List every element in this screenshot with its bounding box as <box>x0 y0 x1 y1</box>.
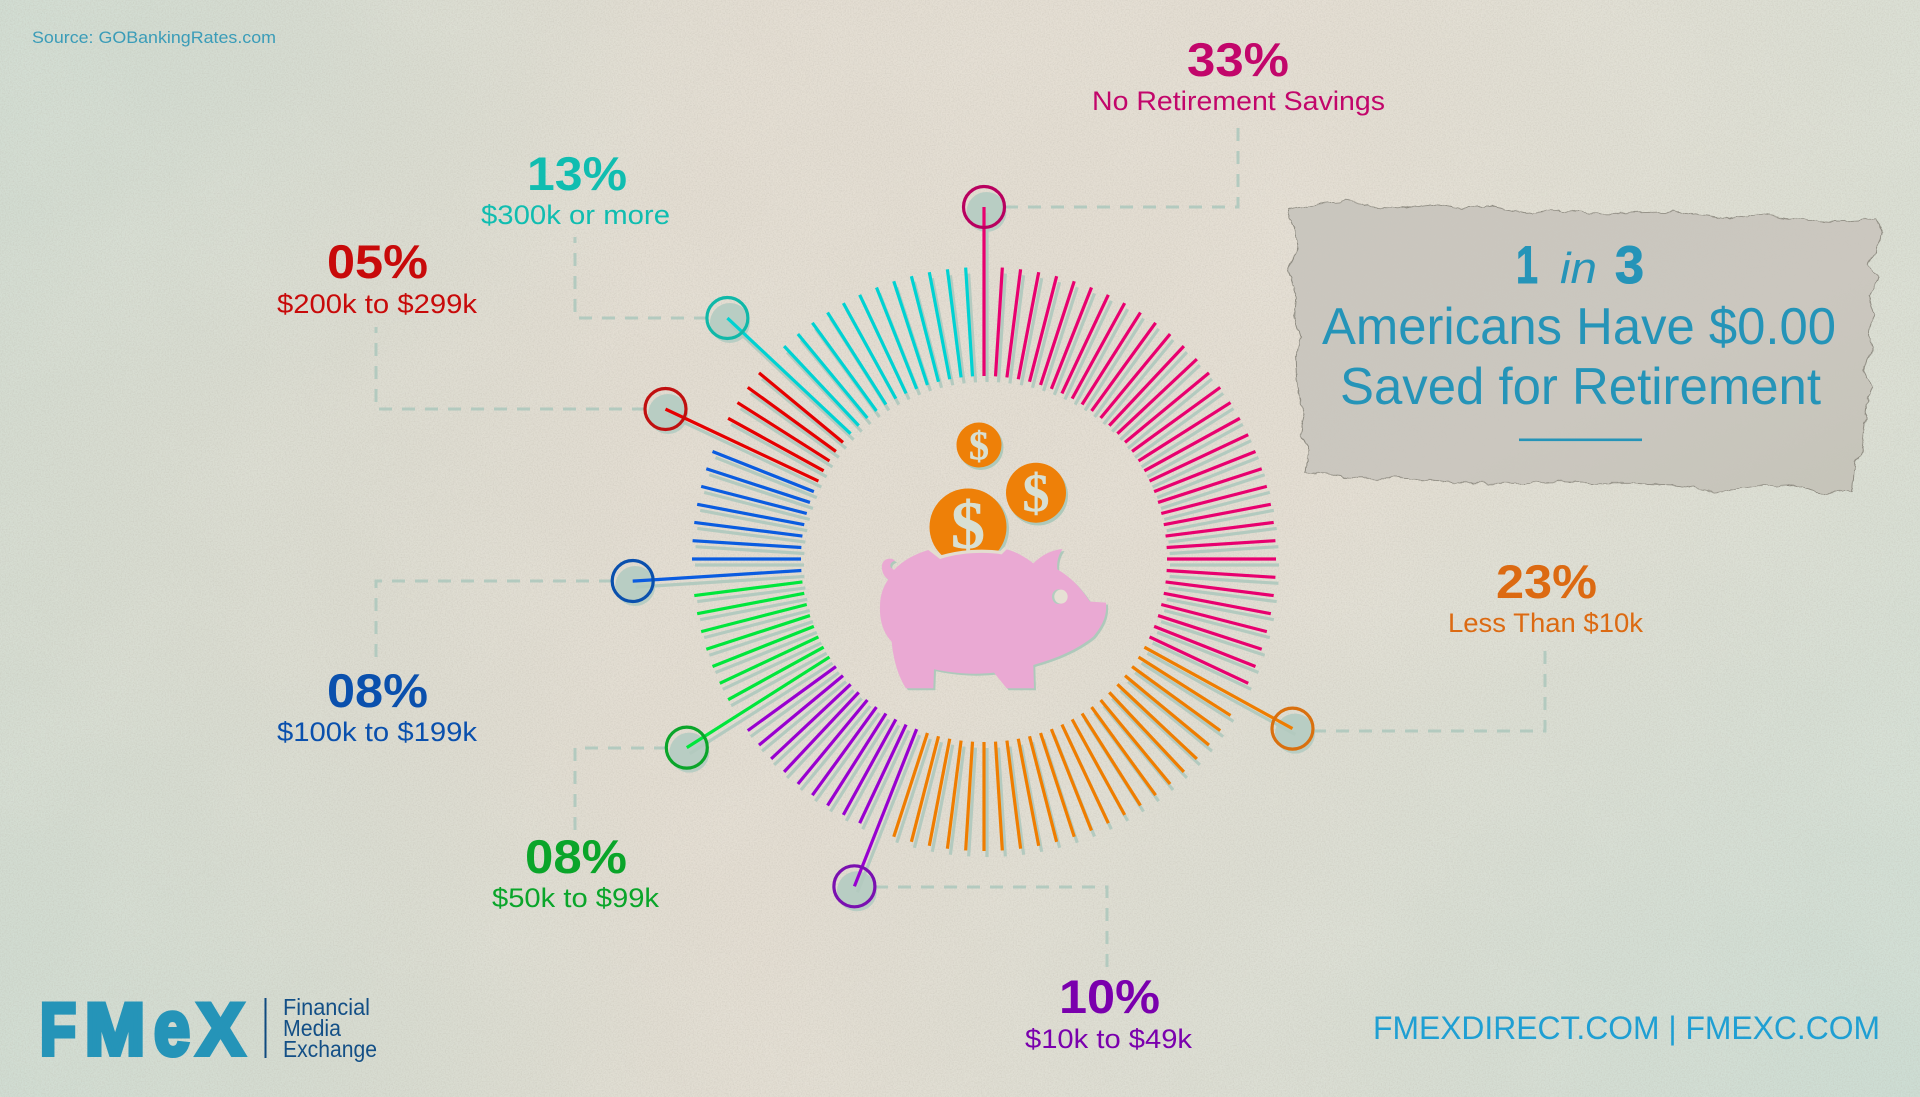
logo tagline <box>283 994 377 1062</box>
callout rule <box>1519 438 1642 441</box>
rays: 05% $200k to $299k <box>666 373 843 481</box>
icon: large coin <box>930 487 1009 568</box>
icon: small coin <box>956 422 1004 470</box>
label: 33%: 33% <box>1187 33 1289 86</box>
rays: 33% no savings <box>984 207 1276 683</box>
label: 23% <box>1448 555 1644 638</box>
logo wordmark: X <box>197 990 244 1070</box>
website links: FMEXDIRECT.COM | FMEXC.COM <box>1373 1010 1880 1046</box>
label: 23%: Less Than $10k <box>1448 608 1644 638</box>
source note: Source: GOBankingRates.com <box>32 28 276 47</box>
label: 10%: $10k to $49k <box>1025 1024 1193 1054</box>
logo wordmark: F <box>40 990 76 1070</box>
icon: medium coin <box>1006 463 1068 526</box>
pin rings <box>612 186 1313 907</box>
icon: small coin: $ <box>969 423 989 468</box>
label: 10% <box>1025 970 1193 1054</box>
label: 13%: 13% <box>527 147 627 200</box>
callout headline: 1 in 3: 3 <box>1615 236 1644 295</box>
label: 08% blue: 08% <box>327 664 428 717</box>
logo divider <box>264 998 266 1058</box>
panel: torn paper callout <box>1288 201 1885 493</box>
label: 13% <box>481 147 670 230</box>
icon: medium coin: $ <box>1022 463 1050 523</box>
dashed connectors <box>376 124 1545 968</box>
label: 10%: 10% <box>1059 970 1160 1023</box>
rays: 23% less than $10k <box>894 647 1292 851</box>
callout headline: 1 in 3: 1 <box>1516 236 1538 295</box>
callout headline: 1 in 3 <box>1516 236 1644 295</box>
logo tagline: Exchange <box>283 1036 377 1062</box>
callout text line 1: Americans Have $0.00 <box>1322 298 1836 356</box>
logo wordmark <box>40 984 244 1072</box>
callout headline: 1 in 3: in <box>1560 244 1597 293</box>
icon: falling coins <box>930 422 1068 568</box>
rays: 08% $100k to $199k <box>633 452 814 581</box>
logo tagline: Media <box>283 1015 341 1041</box>
label: 08% blue <box>277 664 478 747</box>
label: 23%: 23% <box>1496 555 1597 608</box>
label: 05%: $200k to $299k <box>277 289 478 319</box>
label: 05% <box>277 235 478 319</box>
callout text line 2: Saved for Retirement <box>1340 358 1822 416</box>
label: 08% green: $50k to $99k <box>492 883 660 913</box>
torn paper shape <box>1288 201 1885 493</box>
label: 33% <box>1092 33 1385 116</box>
label: 33%: No Retirement Savings <box>1092 86 1385 116</box>
rays: 10% $10k to $49k <box>748 667 917 886</box>
label: 08% green: 08% <box>525 830 627 883</box>
rays: 13% $300k or more <box>727 268 973 434</box>
label: 05%: 05% <box>327 235 428 288</box>
icon: piggy bank <box>880 549 1106 688</box>
label: 08% green <box>492 830 660 913</box>
icon: large coin: $ <box>951 487 985 563</box>
label: 08% blue: $100k to $199k <box>277 717 478 747</box>
logo wordmark: M <box>85 990 145 1070</box>
logo: FMeX Financial Media Exchange <box>40 984 377 1072</box>
logo wordmark: e <box>154 984 190 1072</box>
logo tagline: Financial <box>283 994 370 1020</box>
rays: 08% $50k to $99k <box>687 582 829 748</box>
label: 13%: $300k or more <box>481 200 670 230</box>
pin backgrounds <box>615 192 1315 911</box>
radial ray chart: 100 ticks <box>633 207 1292 886</box>
